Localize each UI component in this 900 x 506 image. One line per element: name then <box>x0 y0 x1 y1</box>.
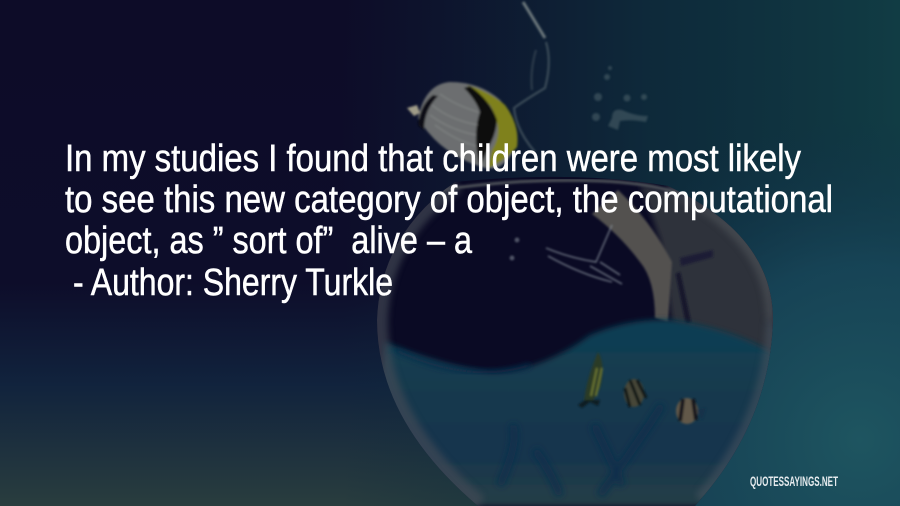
illustration: water stream above bowl <box>514 2 549 152</box>
grey rock reflection in the bowl <box>640 185 775 362</box>
quote line 3: object, as ” sort of” alive – a <box>65 220 473 262</box>
bowl glass rim <box>377 182 478 506</box>
bowl interior <box>370 170 780 506</box>
illustration: three small fish <box>578 352 706 424</box>
watermark: QUOTESSAYINGS.NET <box>750 473 838 489</box>
top rim highlight <box>440 180 680 194</box>
left interior shadow band <box>395 350 530 372</box>
water splash in the bowl <box>510 225 622 284</box>
seaweed shadows <box>500 405 662 495</box>
small fish: right <box>676 398 706 424</box>
illustration: large butterfly fish <box>407 82 518 169</box>
small fish: middle <box>624 379 646 407</box>
small fish: left <box>578 352 603 408</box>
author attribution: - Author: Sherry Turkle <box>73 262 393 304</box>
water in the bowl <box>370 320 775 506</box>
quote text <box>65 138 833 304</box>
illustration: glass fish bowl <box>370 170 780 506</box>
quote line 1: In my studies I found that children were most likely <box>65 138 801 180</box>
illustration: bubbles <box>592 66 648 130</box>
